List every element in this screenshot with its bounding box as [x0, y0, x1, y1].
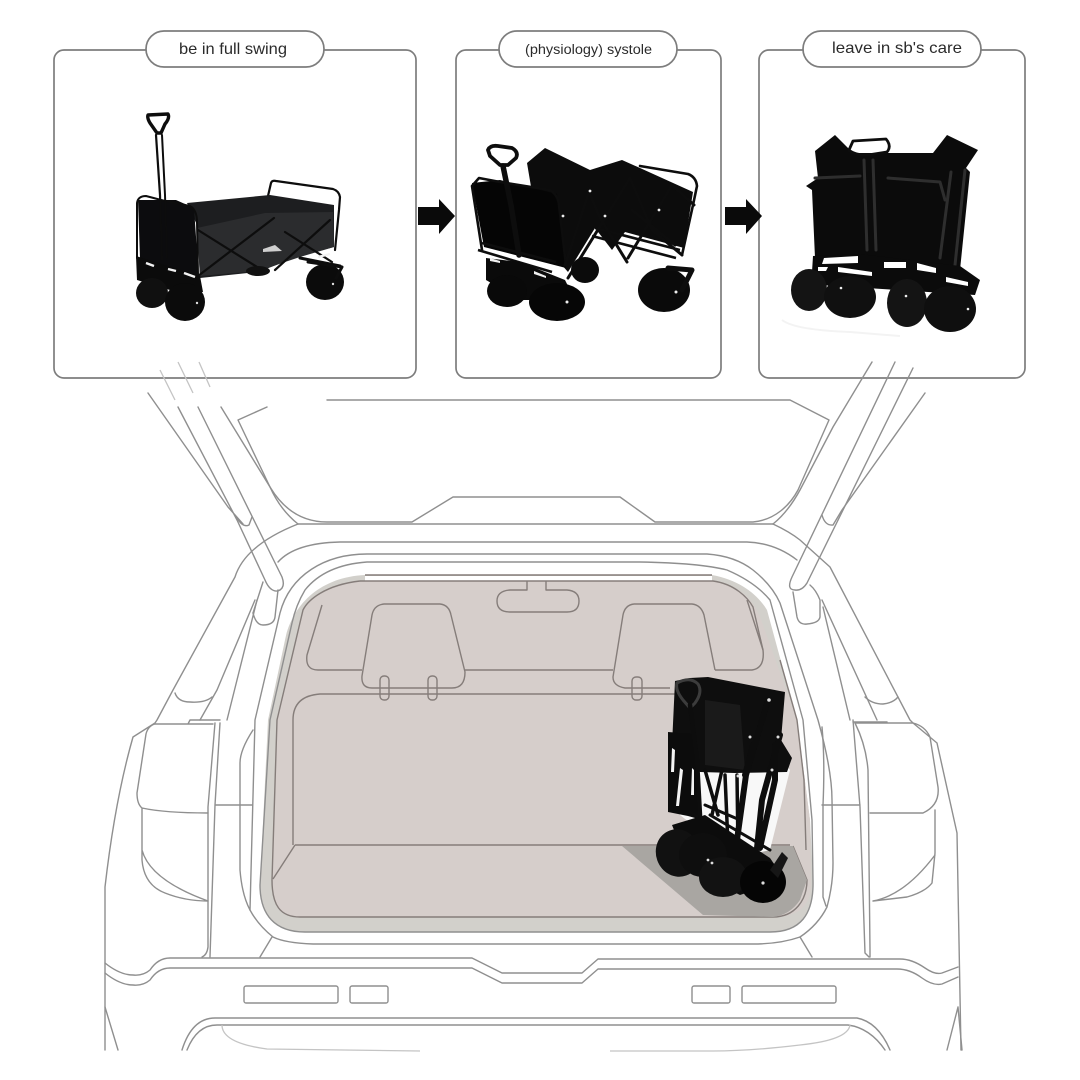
wheels: [791, 269, 827, 311]
label pill: (physiology) systole: [499, 31, 677, 67]
lower frame: [812, 254, 980, 295]
floor edges: [273, 845, 790, 879]
label pill: leave in sb's care: [803, 31, 981, 67]
rear seat back: [293, 581, 763, 845]
icon: fully folded wagon: [782, 135, 980, 336]
tailgate glass: [238, 400, 829, 522]
handle grip: [148, 114, 169, 133]
centre frame: [815, 160, 965, 265]
rear rail: [268, 181, 340, 250]
front rail: [472, 178, 566, 265]
body sides left: [105, 524, 298, 1050]
headrest left: [362, 604, 465, 688]
body upper lines: [298, 523, 773, 525]
handle shaft: [156, 135, 162, 260]
body sides right: [773, 524, 961, 1050]
label pill: be in full swing: [146, 31, 324, 67]
right tail light: [822, 720, 938, 957]
handle: [488, 146, 517, 165]
cast shadow of wagon: [622, 846, 807, 917]
icon: folded wagon in boot: [649, 677, 792, 903]
fabric: [672, 677, 792, 773]
rear view mirror: [497, 581, 579, 612]
headrest right: [613, 604, 715, 688]
reflectors: [244, 986, 836, 1003]
X frame: [565, 178, 694, 278]
illustration: car boot outline: [105, 362, 962, 1051]
side frame: [668, 732, 702, 820]
front rail: [137, 196, 198, 275]
left tail light: [137, 720, 253, 957]
wheels: [571, 257, 599, 283]
icon: half folded wagon: [472, 146, 697, 321]
X frame: [198, 218, 332, 276]
faint ground shadow: [782, 320, 900, 336]
front fabric panel: [138, 200, 199, 280]
panel: be in full swing: [54, 31, 416, 378]
handle grip: [677, 680, 700, 708]
handle: [849, 139, 889, 155]
strut right: [773, 362, 925, 624]
panel: leave in sb's care: [759, 31, 1025, 378]
rear rail: [640, 166, 697, 255]
icon: unfolded wagon: [136, 114, 344, 321]
panel: physiology systole: [456, 31, 721, 378]
boot floor and seat area: [260, 575, 813, 932]
arrow: step one to two: [418, 199, 455, 234]
scissor struts: [737, 700, 780, 848]
wheels: [672, 815, 785, 895]
wheel assembly: [486, 258, 575, 300]
label pill: (physiology) systole: (physiology) systole: [525, 42, 652, 57]
lower rails: [478, 228, 680, 272]
lower bumper: [105, 1007, 962, 1051]
wheels: [246, 266, 270, 276]
interior and side fabric: [187, 195, 334, 278]
label pill: be in full swing: be in full swing: [179, 41, 287, 58]
lower frame: [136, 256, 203, 292]
white gaps behind frame: [672, 750, 790, 858]
label pill: leave in sb's care: leave in sb's care: [832, 40, 962, 57]
gaps in lower frame: [818, 256, 968, 286]
fabric body: [806, 135, 978, 270]
strut left: [148, 362, 298, 625]
headrest posts: [380, 676, 389, 700]
arrow: step two to three: [725, 199, 762, 234]
folded fabric: [527, 148, 693, 272]
bumper: [105, 958, 958, 985]
